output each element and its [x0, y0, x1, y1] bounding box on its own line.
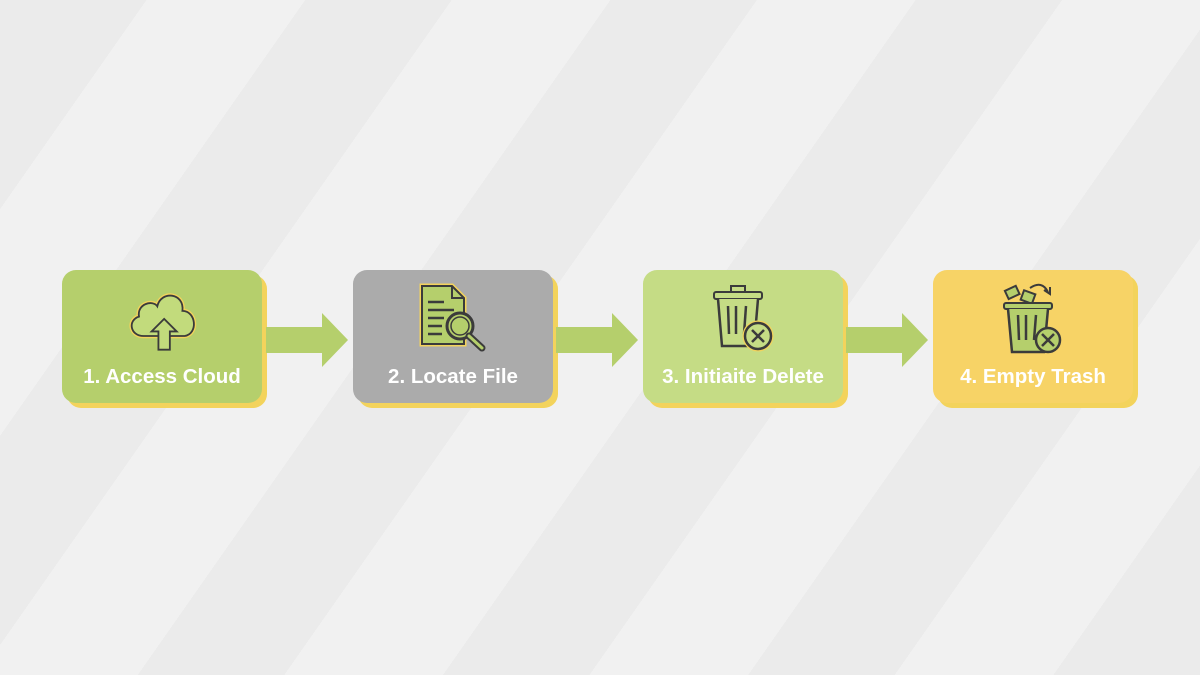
- label: 1. Access Cloud: [83, 365, 241, 388]
- icon: trash with x: [713, 285, 774, 352]
- icon: emptying trash: [1003, 284, 1062, 354]
- arrow 2: [556, 313, 638, 367]
- step 4: Empty Trash: [933, 270, 1133, 403]
- icon: document search: [420, 284, 486, 352]
- arrow 1: [266, 313, 348, 367]
- step 2: Locate File: [353, 270, 553, 403]
- arrow 3: [846, 313, 928, 367]
- label: 3. Initiaite Delete: [662, 365, 824, 388]
- label: 4. Empty Trash: [960, 365, 1106, 388]
- icon: cloud upload: [129, 293, 196, 351]
- step 1: Access Cloud: [62, 270, 262, 403]
- label: 2. Locate File: [388, 365, 518, 388]
- step 3: Initiate Delete: [643, 270, 843, 403]
